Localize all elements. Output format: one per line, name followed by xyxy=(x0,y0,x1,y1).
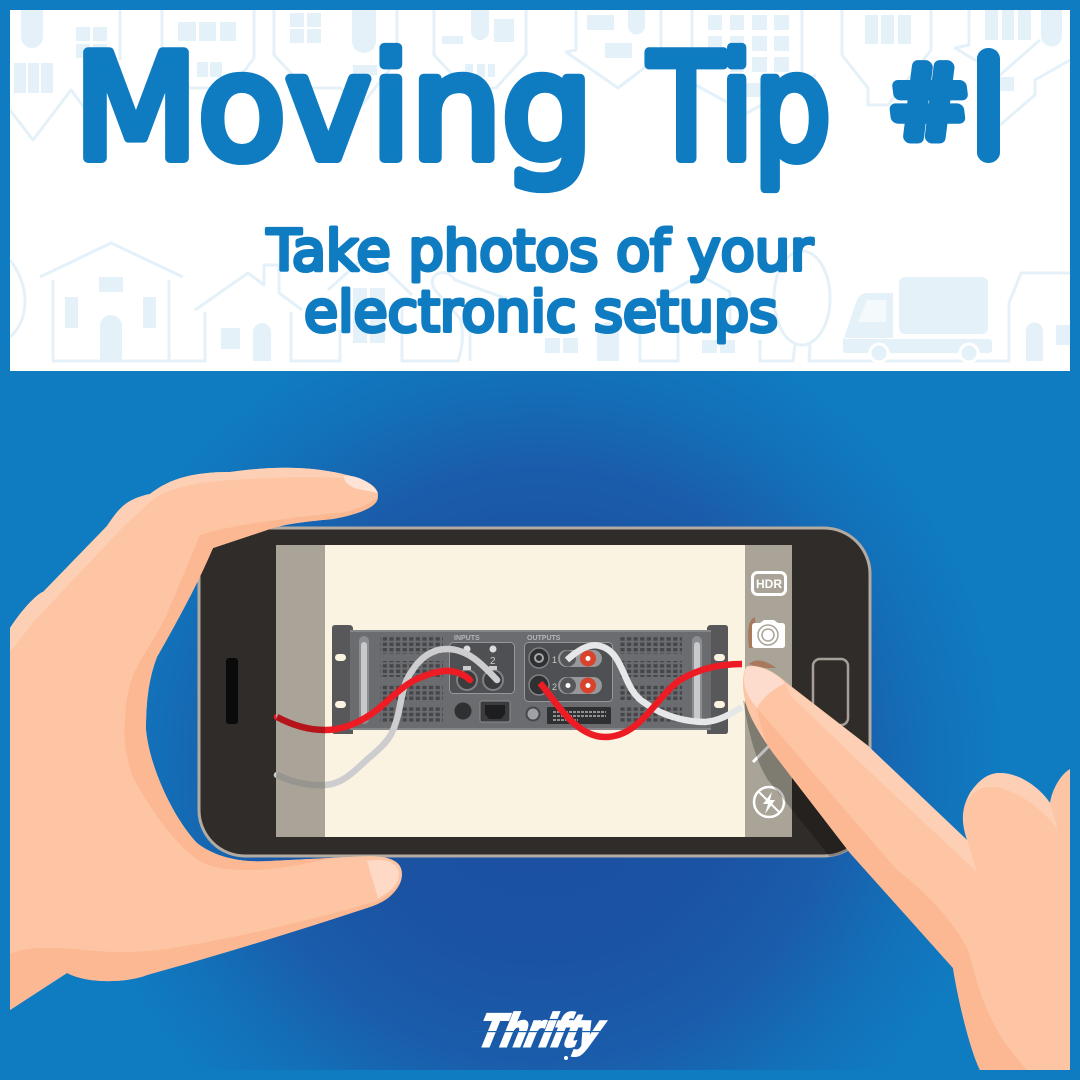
knuckle highlight xyxy=(966,773,1058,830)
icon: flash off xyxy=(754,787,784,817)
outputs panel: 2 xyxy=(552,682,557,692)
right rack ear xyxy=(707,625,728,734)
white cable right xyxy=(567,645,742,722)
inputs panel xyxy=(450,635,514,694)
ear slots xyxy=(335,654,725,708)
delivery truck silhouette xyxy=(843,277,992,362)
thumb underside xyxy=(10,882,400,1010)
title: Moving xyxy=(74,24,593,193)
subtitle xyxy=(266,219,814,345)
inner palm shading xyxy=(124,530,350,870)
inputs panel: INPUTS xyxy=(454,635,480,642)
icon: HDR: HDR xyxy=(756,577,782,591)
outputs panel: 1 xyxy=(552,655,557,665)
grey cable left xyxy=(277,649,497,785)
fingernail xyxy=(744,666,785,708)
header panel xyxy=(10,10,1070,371)
smartphone xyxy=(199,528,870,857)
subtitle: electronic setups xyxy=(304,280,778,345)
Thrifty logo: Thrifty xyxy=(470,1006,613,1057)
index finger underside xyxy=(200,497,378,548)
finger shadow on phone xyxy=(743,700,848,856)
thumbnail xyxy=(367,860,399,898)
title: # xyxy=(881,47,977,161)
audio amplifier xyxy=(332,625,728,734)
icon: HDR xyxy=(752,572,786,594)
amplifier body xyxy=(350,630,711,730)
title: 1 xyxy=(941,22,1035,193)
home button xyxy=(813,659,848,725)
back of hand highlight xyxy=(10,468,345,652)
left camera bar xyxy=(276,545,325,837)
speaker xyxy=(226,658,238,724)
right hand xyxy=(743,661,1070,1070)
title xyxy=(83,42,1000,194)
finger upper highlight xyxy=(785,683,977,872)
title: Tip xyxy=(648,24,831,193)
gradient background panel xyxy=(10,371,1070,1070)
index fingernail xyxy=(344,476,378,493)
icon: magic wand xyxy=(753,745,770,762)
finger lower shading xyxy=(757,708,1027,1070)
power switch and socket xyxy=(454,701,540,722)
icon: camera xyxy=(752,620,785,648)
hand and pointing finger xyxy=(743,666,1070,1070)
inputs panel: 2 xyxy=(490,656,496,667)
left hand xyxy=(10,468,402,1010)
left rack ear xyxy=(332,625,353,734)
fingertip shadow xyxy=(749,661,776,668)
outputs panel xyxy=(524,635,612,702)
camera screen xyxy=(276,545,792,837)
handles xyxy=(359,636,702,724)
outputs panel: OUTPUTS xyxy=(527,635,561,642)
palm and fingers xyxy=(10,468,402,1010)
white header background xyxy=(10,10,1070,371)
cables xyxy=(277,645,742,785)
right camera bar xyxy=(745,545,792,837)
phone body xyxy=(199,528,870,856)
subtitle: Take photos of your xyxy=(266,219,814,284)
warning label xyxy=(547,707,611,724)
icon: finger shadow on camera xyxy=(748,617,756,648)
hands xyxy=(10,468,1070,1070)
neighbourhood pattern xyxy=(10,10,1070,362)
red cable left xyxy=(277,671,470,730)
red cable right xyxy=(540,664,742,737)
vents xyxy=(380,637,682,723)
